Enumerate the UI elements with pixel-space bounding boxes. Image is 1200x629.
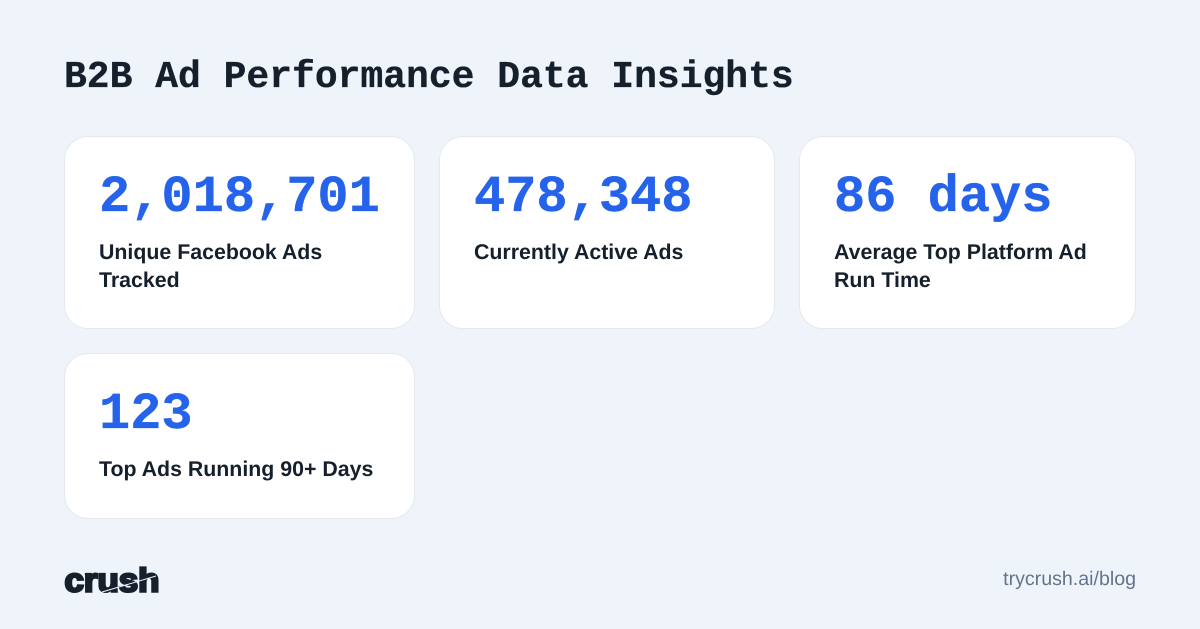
source url: trycrush.ai/blog	[1003, 568, 1136, 590]
label: currently active ads: Currently Active Ads	[474, 240, 683, 264]
label: average top platform ad run time: Run Time	[834, 268, 931, 292]
label: average top platform ad run time: Average Top Platform Ad	[834, 240, 1087, 264]
panel: average top platform ad run time	[799, 136, 1136, 329]
stat: 2,018,701: 2,018,701	[99, 168, 380, 227]
stat: 123: 123	[99, 385, 193, 444]
stat: 478,348: 478,348	[474, 168, 692, 227]
title: B2B Ad Performance Data Insights	[64, 56, 794, 99]
panel: top ads running 90+ days	[64, 353, 415, 519]
panel: currently active ads	[439, 136, 775, 329]
stat: 86 days: 86 days	[834, 168, 1052, 227]
logo: crush: crush	[64, 562, 160, 598]
label: unique Facebook ads tracked: Unique Facebook Ads	[99, 240, 322, 264]
label: average top platform ad run time	[834, 240, 1087, 292]
label: unique Facebook ads tracked: Tracked	[99, 268, 180, 292]
label: top ads running 90+ days: Top Ads Running 90+ Days	[99, 457, 373, 481]
panel: unique Facebook ads tracked	[64, 136, 415, 329]
label: unique Facebook ads tracked	[99, 240, 322, 292]
